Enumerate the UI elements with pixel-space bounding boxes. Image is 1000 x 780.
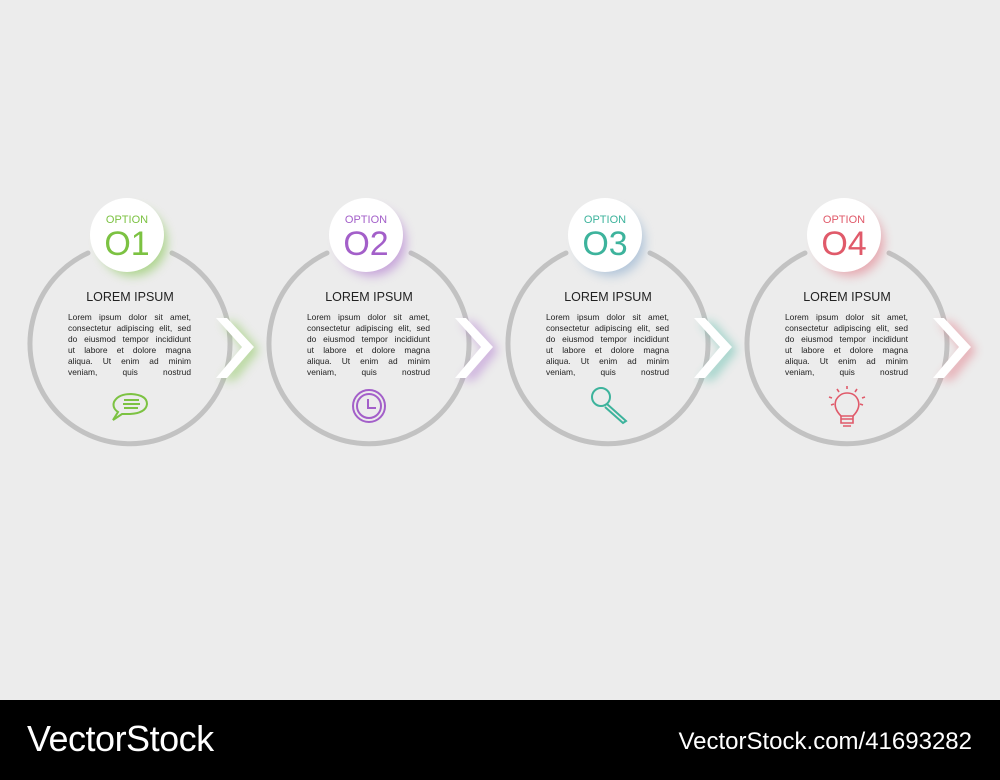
panel 2 text: ut labore et dolore magna	[307, 345, 430, 355]
panel 3 text: aliqua. Ut enim ad minim	[546, 356, 669, 366]
icon: light bulb	[829, 386, 865, 426]
panel 1 text: aliqua. Ut enim ad minim	[68, 356, 191, 366]
panel 1 heading: LOREM IPSUM	[86, 290, 174, 304]
panel 4 text: aliqua. Ut enim ad minim	[785, 356, 908, 366]
icon: speech bubble	[113, 394, 147, 420]
panel 1 text: veniam, quis nostrud	[68, 367, 191, 377]
panel 2 rings and chevron: O2	[343, 225, 389, 263]
panel 2 text: Lorem ipsum dolor sit amet,	[307, 312, 430, 322]
panel 4 text: ut labore et dolore magna	[785, 345, 908, 355]
panel 1 rings and chevron	[30, 198, 259, 444]
panel 3 text: do eiusmod tempor incididunt	[546, 334, 669, 344]
footer bar: VectorStock	[27, 718, 214, 759]
panel 1 text: ut labore et dolore magna	[68, 345, 191, 355]
panel 2 heading: LOREM IPSUM	[325, 290, 413, 304]
panel 2 rings and chevron	[269, 198, 498, 444]
panel 1 rings and chevron: O1	[104, 225, 150, 263]
panel 3 rings and chevron: OPTION	[584, 214, 626, 226]
panel 4 rings and chevron: OPTION	[823, 214, 865, 226]
panel 3 rings and chevron: O3	[582, 225, 628, 263]
panel 2 text	[307, 312, 430, 377]
panel 4 rings and chevron	[747, 198, 976, 444]
panel 4 text: veniam, quis nostrud	[785, 367, 908, 377]
panel 1 text	[68, 312, 192, 377]
icon: clock	[353, 390, 385, 422]
panel 3 heading: LOREM IPSUM	[564, 290, 652, 304]
panel 3 text: consectetur adipiscing elit, sed	[546, 323, 669, 333]
panel 3 rings and chevron	[508, 198, 737, 444]
panel 4 text: consectetur adipiscing elit, sed	[785, 323, 908, 333]
panel 4 heading: LOREM IPSUM	[803, 290, 891, 304]
footer bar	[0, 700, 1000, 780]
panel 4 text: do eiusmod tempor incididunt	[785, 334, 908, 344]
panel 3 text: Lorem ipsum dolor sit amet,	[546, 312, 669, 322]
panel 4 text: Lorem ipsum dolor sit amet,	[785, 312, 908, 322]
icon: magnifier	[592, 388, 626, 423]
panel 1 text: do eiusmod tempor incididunt	[68, 334, 191, 344]
panel 2 text: consectetur adipiscing elit, sed	[307, 323, 430, 333]
panel 4 text	[785, 312, 908, 377]
panel 3 text	[546, 312, 670, 377]
panel 3 text: ut labore et dolore magna	[546, 345, 669, 355]
panel 2 text: do eiusmod tempor incididunt	[307, 334, 430, 344]
panel 1 text: Lorem ipsum dolor sit amet,	[68, 312, 191, 322]
panel 1 rings and chevron: OPTION	[106, 214, 148, 226]
panel 3 text: veniam, quis nostrud	[546, 367, 669, 377]
panel 2 rings and chevron: OPTION	[345, 214, 387, 226]
panel 2 text: veniam, quis nostrud	[307, 367, 430, 377]
panel 1 text: consectetur adipiscing elit, sed	[68, 323, 191, 333]
panel 4 rings and chevron: O4	[821, 225, 867, 263]
footer bar: VectorStock.com/41693282	[678, 728, 972, 755]
panel 2 text: aliqua. Ut enim ad minim	[307, 356, 430, 366]
